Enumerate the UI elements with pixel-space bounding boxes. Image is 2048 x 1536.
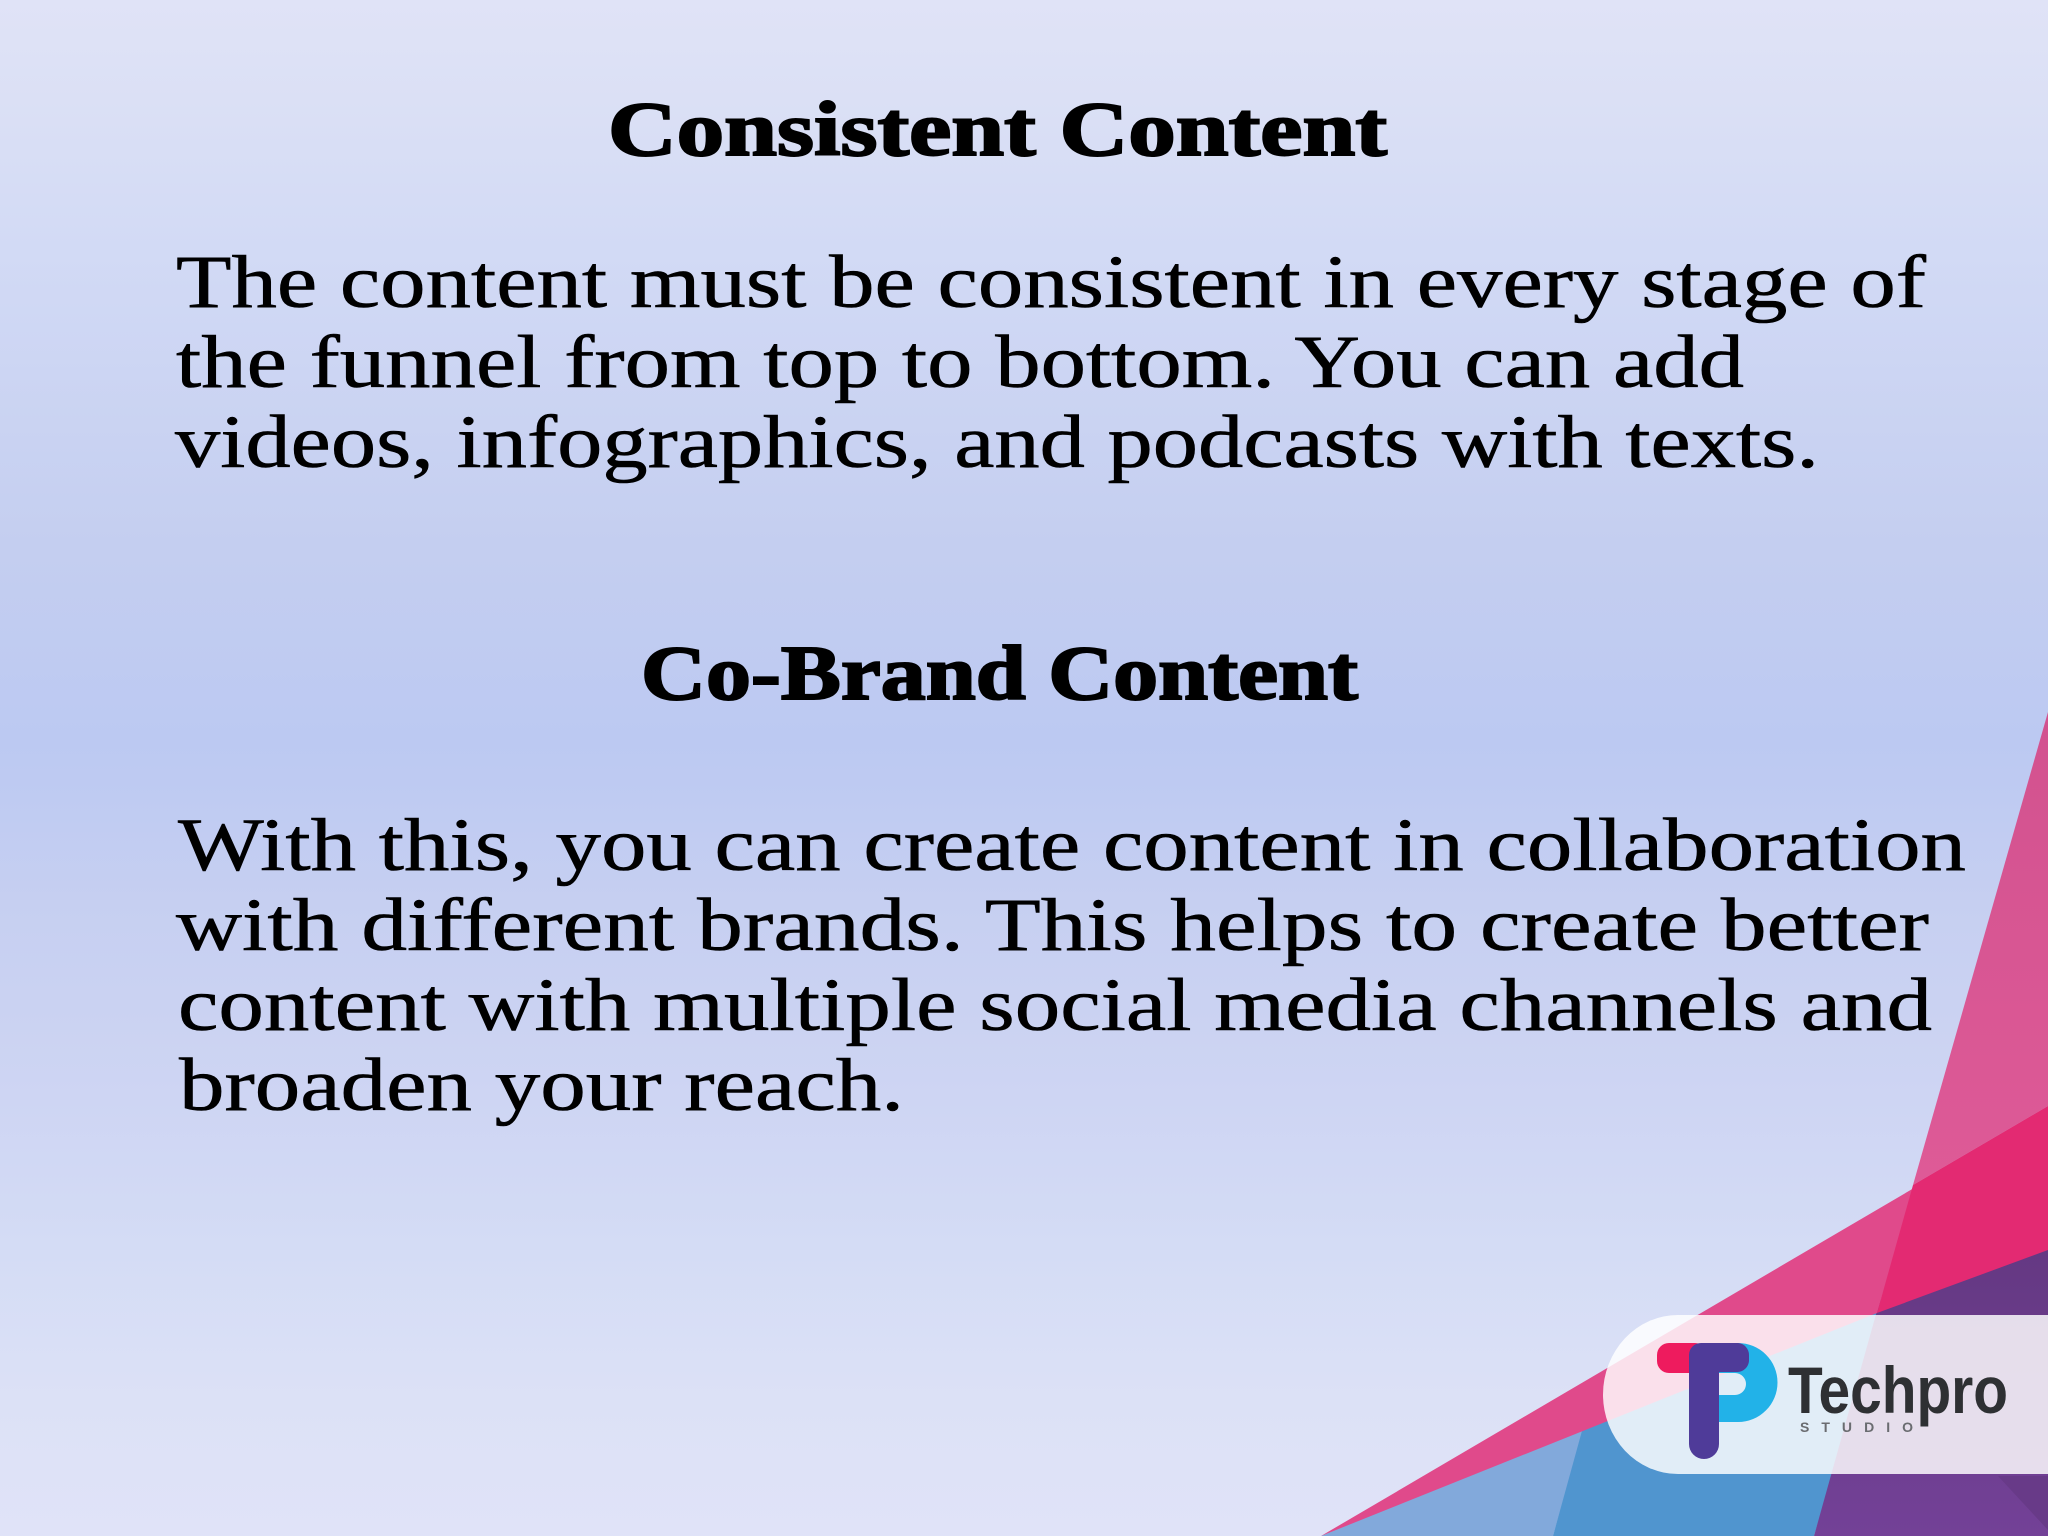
body text: co-brand content: broaden your reach. [179,1044,904,1127]
decorative corner shapes [1321,712,2048,1536]
logo wordmark: STUDIO [1800,1419,1913,1435]
heading: consistent content: Consistent Content [608,86,1387,172]
body text: consistent content: videos, infographics, and podcasts with texts. [175,401,1819,484]
heading: co-brand content: Co-Brand Content [641,630,1358,716]
body text: co-brand content: with different brands. This helps to create better [176,884,1929,967]
body text: co-brand content: With this, you can create content in collaboration [178,804,1966,887]
logo mark [1657,1343,1778,1459]
body text: consistent content [175,241,1926,484]
section: consistent content [175,86,1926,484]
logo wordmark: Techpro [1788,1353,2008,1427]
logo panel [1603,1315,2048,1474]
body text: consistent content: The content must be consistent in every stage of [176,241,1926,324]
body text: co-brand content [176,804,1966,1127]
body text: consistent content: the funnel from top to bottom. You can add [176,321,1744,404]
body text: co-brand content: content with multiple social media channels and [178,964,1932,1047]
section: co-brand content [176,630,1966,1127]
